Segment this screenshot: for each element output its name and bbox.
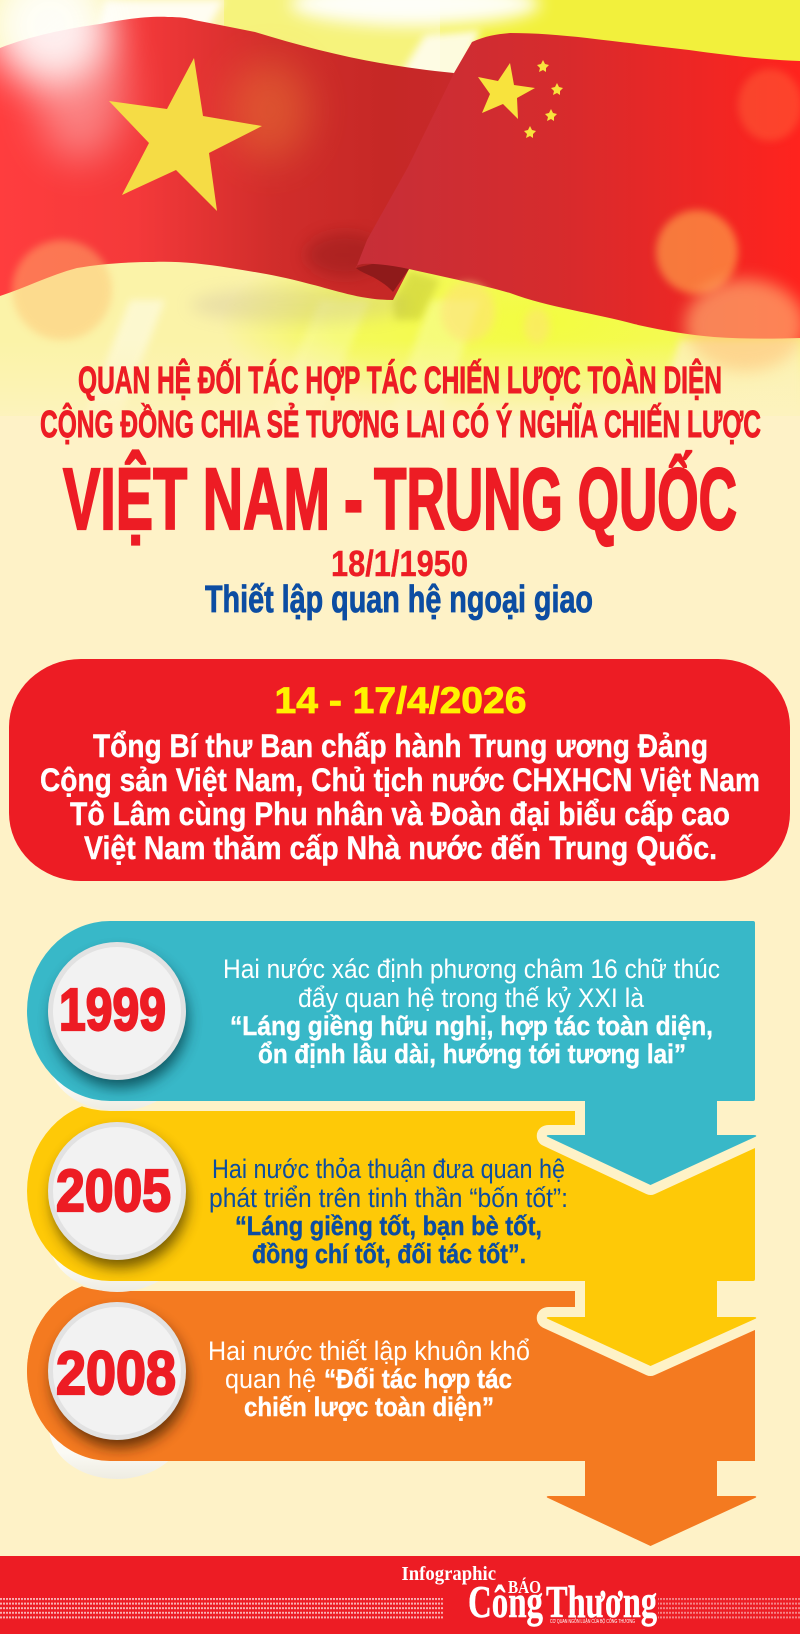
item text: [223, 954, 720, 1069]
title block: [40, 357, 761, 621]
circle reflection: [49, 1188, 185, 1292]
year badge: 2005: [56, 1158, 171, 1224]
panel date: 14 - 17/4/2026: [274, 680, 526, 721]
icon: Vietnam star: [109, 58, 262, 211]
item text: [209, 1154, 568, 1269]
subtitle: Thiết lập quan hệ ngoại giao: [205, 579, 593, 621]
year badge: 1999: [59, 977, 166, 1043]
item text: quan hệ: [225, 1364, 316, 1394]
date: 18/1/1950: [331, 543, 468, 584]
logo: Báo Công Thương: BÁO: [508, 1576, 541, 1597]
panel text: Tô Lâm cùng Phu nhân và Đoàn đại biểu cấp cao: [70, 796, 730, 832]
item text: “Láng giềng hữu nghị, hợp tác toàn diện,: [230, 1011, 713, 1041]
icon: China large star: [478, 63, 535, 119]
item text: Hai nước thiết lập khuôn khổ: [208, 1336, 530, 1366]
logo: Báo Công Thương: Công: [468, 1576, 543, 1627]
item text: “Láng giềng tốt, bạn bè tốt,: [235, 1211, 542, 1241]
year badge: 2008: [56, 1339, 176, 1407]
timeline item: 1999: [27, 921, 800, 1185]
timeline item: 2005: [27, 1101, 800, 1366]
panel text: Việt Nam thăm cấp Nhà nước đến Trung Quốc.: [84, 830, 717, 866]
logo: Báo Công Thương: [468, 1576, 657, 1627]
item text: Hai nước thỏa thuận đưa quan hệ: [212, 1154, 565, 1184]
item text: đồng chí tốt, đối tác tốt”.: [252, 1239, 526, 1269]
panel text: Tổng Bí thư Ban chấp hành Trung ương Đảng: [93, 728, 708, 764]
flag: Vietnam: [0, 0, 454, 300]
item text: ổn định lâu dài, hướng tới tương lai”: [258, 1039, 686, 1069]
item text: Hai nước xác định phương châm 16 chữ thúc: [223, 954, 720, 984]
footer label: Infographic: [402, 1563, 496, 1585]
year badge: [48, 1302, 186, 1440]
main title: -: [344, 451, 363, 548]
panel text: [40, 728, 760, 866]
footer bar: [0, 1556, 800, 1634]
main title: [63, 451, 737, 548]
logo: Báo Công Thương: Thương: [546, 1576, 657, 1627]
item text: “Đối tác hợp tác: [324, 1364, 512, 1394]
panel: state visit: [9, 659, 790, 881]
item text: chiến lược toàn diện”: [244, 1392, 494, 1422]
year badge: [48, 942, 186, 1080]
flag: China: [356, 33, 800, 339]
circle reflection: [49, 1007, 185, 1111]
item text: [208, 1336, 530, 1422]
item text: đẩy quan hệ trong thế kỷ XXI là: [298, 983, 645, 1013]
bokeh lights: [12, 69, 800, 371]
year badge: [48, 1122, 186, 1260]
logo: Báo Công Thương: CƠ QUAN NGÔN LUẬN CỦA BỘ CÔNG THƯƠNG: [550, 1618, 635, 1625]
timeline item: 2008: [27, 1281, 756, 1546]
icon: China small stars: [524, 60, 563, 138]
main title: VIỆT NAM: [63, 451, 330, 548]
banner: flags and light background: [0, 0, 800, 416]
item text: phát triển trên tinh thần “bốn tốt”:: [209, 1183, 568, 1213]
circle reflection: [49, 1375, 185, 1479]
